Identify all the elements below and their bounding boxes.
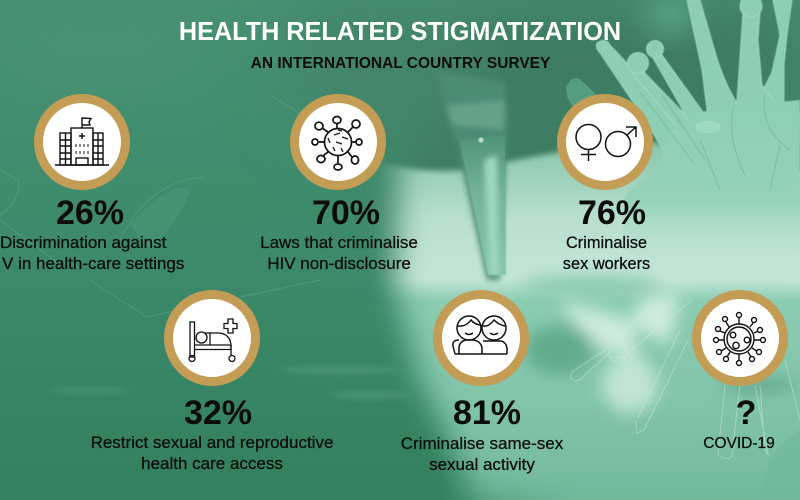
icon: two people [433,290,529,386]
faint background icons [0,95,320,317]
icon: coronavirus [692,290,788,386]
label: same-sex [401,434,564,474]
stat: 26%: 26% [56,194,124,232]
stat: 81%: 81% [453,394,521,432]
label: discrimination: V in health-care settings [2,254,184,273]
label: same-sex: sexual activity [429,454,535,474]
virus surface shading [640,92,790,190]
title: HEALTH RELATED STIGMATIZATION [179,16,621,46]
label: laws: HIV non-disclosure [267,254,411,272]
label: restrict [91,433,333,472]
label: sex workers: sex workers [563,254,650,272]
stat: 70%: 70% [312,194,380,232]
label: same-sex: Criminalise same-sex [401,434,563,453]
pale lower-right glow [374,139,800,500]
label: discrimination: Discrimination against [0,233,166,252]
virus spikes [567,0,800,270]
icon: hospital [34,94,130,190]
icon: gender symbols [557,94,653,190]
label: discrimination [0,233,184,273]
needle [437,72,507,280]
label: sex workers [563,234,650,272]
icon: virus [290,94,386,190]
label: COVID-19: COVID-19 [703,435,775,452]
label: sex workers: Criminalise [566,234,647,252]
label: laws [260,233,418,272]
stat: 32%: 32% [184,394,252,432]
stat: 76%: 76% [578,194,646,232]
label: restrict: health care access [141,454,283,472]
label: restrict: Restrict sexual and reproductive [91,433,333,452]
pale spikes lower [571,300,800,458]
floor texture [50,366,410,399]
icon: hospital bed [164,290,260,386]
stat: question mark: ? [736,394,756,432]
label: laws: Laws that criminalise [260,233,418,252]
subtitle: AN INTERNATIONAL COUNTRY SURVEY [251,55,550,72]
